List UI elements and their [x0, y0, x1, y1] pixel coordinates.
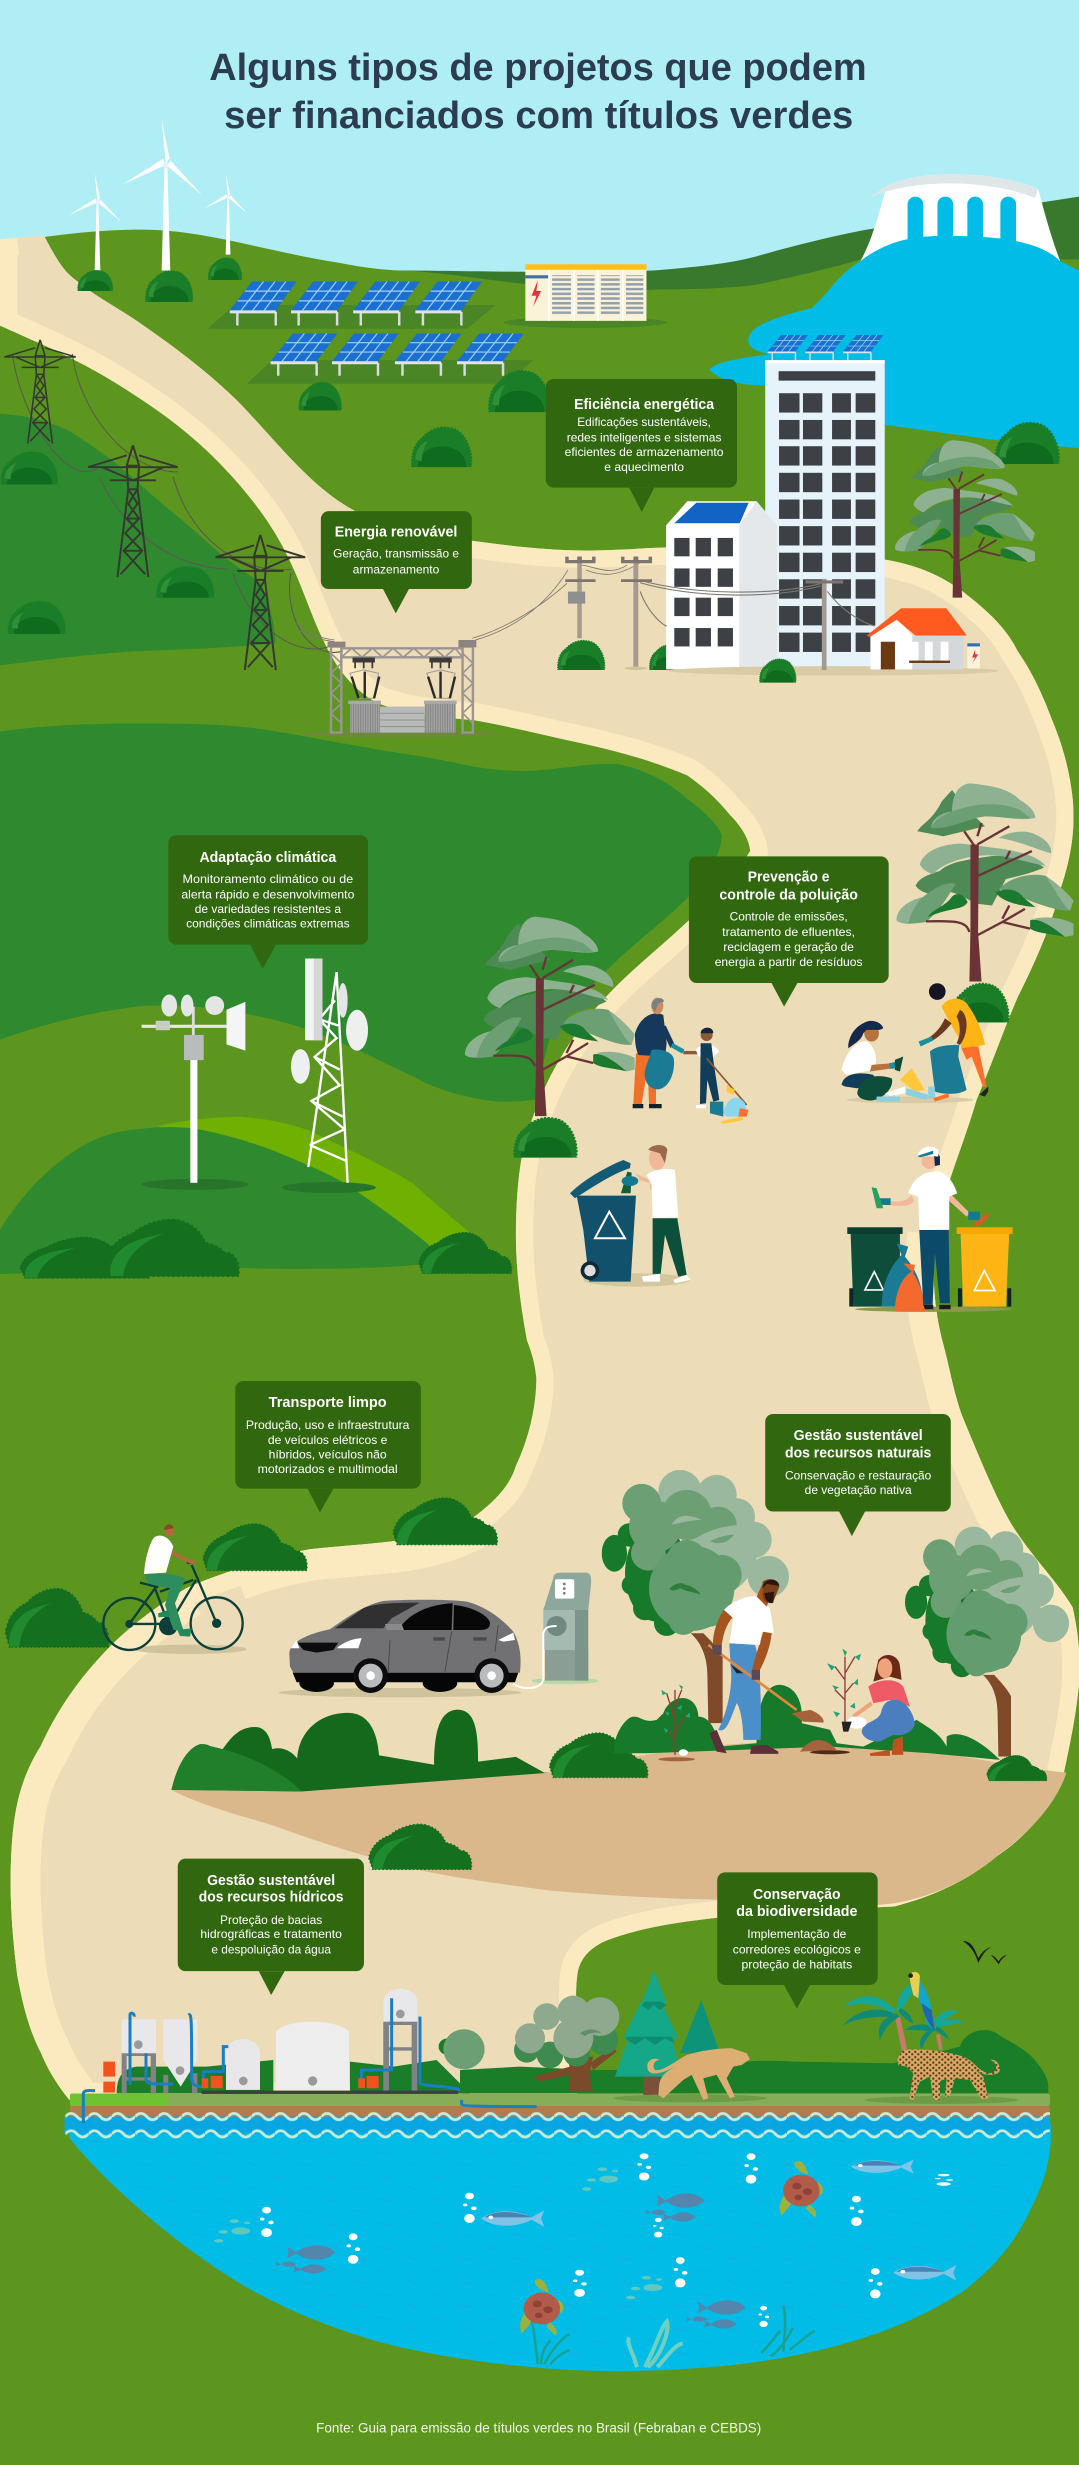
man at bin	[570, 1145, 691, 1287]
back bush	[117, 2060, 470, 2093]
icon: wind turbine center	[123, 120, 202, 271]
bush in front of tree	[757, 1685, 837, 1747]
icon: tank 5	[383, 1989, 417, 2022]
callout: Eficiência energética: Edificações sustentáveis,	[577, 416, 711, 429]
callout: Eficiência energética: redes inteligentes e sistemas	[567, 431, 722, 444]
callout: Gestão sustentável dos recursos naturais	[765, 1414, 951, 1536]
bushes near cyclist	[5, 1498, 497, 1647]
tan ground	[171, 1742, 1066, 1906]
icon: wind turbine left	[69, 173, 121, 271]
callout: Energia renovável: Geração, transmissão e	[333, 548, 459, 561]
callout: Transporte limpo: Produção, uso e infraestrutura	[246, 1419, 410, 1432]
callout: Adaptação climática: de variedades resistentes a	[195, 903, 342, 916]
callout: Gestão sustentável dos recursos hídricos: Gestão sustentável	[207, 1873, 335, 1889]
icon: roof solar	[674, 503, 749, 523]
title	[209, 46, 867, 136]
sky	[0, 0, 1079, 299]
callout: Eficiência energética: eficientes de armazenamento	[565, 446, 724, 459]
transport scene	[103, 1524, 598, 1697]
tree by house	[895, 440, 1035, 598]
sapling	[658, 1685, 695, 1761]
callout: Gestão sustentável dos recursos naturais: de vegetação nativa	[805, 1484, 912, 1497]
callout: Adaptação climática: condições climáticas extremas	[186, 918, 350, 931]
bush near house	[760, 659, 796, 683]
icon: tank 3	[226, 2039, 260, 2090]
medium tree	[514, 1996, 619, 2092]
callout: Conservação da biodiversidade: proteção de habitats	[741, 1958, 852, 1971]
wires	[297, 563, 639, 642]
frames	[122, 2022, 417, 2093]
hill large left	[0, 724, 722, 1102]
icon: pylon 3	[215, 535, 305, 670]
callout: Gestão sustentável dos recursos hídricos: dos recursos hídricos	[199, 1889, 344, 1905]
callout: Energia renovável: Energia renovável	[335, 524, 457, 540]
callout: Transporte limpo	[235, 1381, 421, 1512]
hill upper left	[0, 414, 275, 665]
icon: pumps	[103, 2062, 379, 2093]
source footer: Fonte: Guia para emissão de títulos verdes no Brasil (Febraban e CEBDS)	[316, 2420, 761, 2435]
bright hill crescent	[157, 1117, 495, 1274]
ground strip	[64, 2093, 1050, 2139]
callout: Gestão sustentável dos recursos naturais: dos recursos naturais	[785, 1446, 931, 1462]
road	[0, 236, 1079, 2100]
icon: tank 1	[122, 2019, 156, 2053]
recycling scene	[570, 1145, 1013, 1312]
callout: Gestão sustentável dos recursos naturais: Gestão sustentável	[794, 1428, 923, 1444]
callout: Adaptação climática	[168, 835, 368, 969]
callout: Energia renovável: armazenamento	[353, 563, 439, 576]
callout: Prevenção e controle da poluição: Controle de emissões,	[730, 911, 848, 924]
callout: Conservação da biodiversidade: Implementação de	[747, 1928, 846, 1941]
bush on tan ground	[369, 1824, 472, 1870]
cyclist	[103, 1524, 247, 1654]
callout: Eficiência energética: Eficiência energética	[574, 397, 715, 413]
light green hills	[0, 230, 1079, 818]
seaweed	[532, 2306, 815, 2367]
planting scene	[602, 1470, 1069, 1761]
transmission towers	[4, 340, 305, 670]
water	[69, 2123, 1051, 2371]
large bushes hill	[20, 1219, 512, 1278]
bush below left tree	[514, 1118, 576, 1158]
small tree	[439, 2029, 485, 2093]
icon: utility pole 2	[621, 557, 652, 670]
electric car	[278, 1600, 522, 1697]
icon: utility pole 1	[565, 557, 596, 638]
big bush strip	[171, 1710, 551, 1791]
man planting	[708, 1579, 850, 1754]
wildlife and trees	[460, 1970, 1048, 2104]
hill lower left	[0, 1127, 447, 1274]
people cleaning left	[633, 998, 748, 1124]
back bushes	[460, 2030, 1048, 2093]
pole bushes	[558, 641, 686, 670]
title: Alguns tipos de projetos que podem	[209, 46, 867, 88]
man with bag	[633, 998, 683, 1108]
callout: Eficiência energética	[546, 379, 737, 512]
palm trees	[843, 1983, 965, 2050]
charging station	[513, 1573, 598, 1688]
lake	[709, 236, 1079, 448]
tall building	[765, 335, 885, 669]
shadow row 2	[247, 360, 533, 384]
callout: Gestão sustentável dos recursos hídricos: Proteção de bacias	[220, 1914, 322, 1927]
child with rake	[683, 1028, 748, 1124]
left tree	[465, 917, 635, 1116]
icon: yellow bin	[957, 1227, 1013, 1307]
dark distant hills	[401, 197, 1079, 409]
callout: Adaptação climática: Adaptação climática	[199, 850, 337, 866]
marine life	[214, 2153, 956, 2336]
tree right	[905, 1527, 1069, 1757]
tree left	[602, 1470, 789, 1723]
birds	[963, 1941, 1007, 1965]
callout: Conservação da biodiversidade: da biodiversidade	[736, 1904, 857, 1920]
power lines between pylons	[13, 354, 343, 652]
callout: Transporte limpo: híbridos, veículos não	[269, 1449, 387, 1462]
callout: Transporte limpo: de veículos elétricos e	[268, 1434, 387, 1447]
callout: Prevenção e controle da poluição: Prevenção e	[748, 869, 830, 885]
callout: Prevenção e controle da poluição: controle da poluição	[719, 887, 858, 903]
callout: Transporte limpo: motorizados e multimodal	[258, 1463, 398, 1476]
callout: Adaptação climática: alerta rápido e desenvolvimento	[181, 888, 354, 901]
icon: tank 4	[276, 2022, 349, 2090]
callout: Prevenção e controle da poluição: energia a partir de resíduos	[715, 956, 863, 969]
title: ser financiados com títulos verdes	[224, 94, 853, 136]
callout: Transporte limpo: Transporte limpo	[269, 1395, 387, 1411]
callout: Gestão sustentável dos recursos hídricos: e despoluição da água	[211, 1943, 331, 1956]
telecom tower	[282, 959, 376, 1193]
icon: rooftop solar panels	[768, 335, 883, 360]
person at bins	[847, 1146, 1013, 1312]
callout: Prevenção e controle da poluição: tratamento de efluentes,	[722, 926, 855, 939]
ground shadow buildings	[668, 666, 999, 676]
callout: Energia renovável	[321, 511, 472, 613]
top bushes	[78, 258, 241, 302]
pine trees	[615, 1970, 720, 2095]
icon: dark bin	[847, 1227, 903, 1307]
solar farm	[208, 282, 533, 384]
icon: pipes	[83, 1998, 537, 2123]
back bushes	[613, 1685, 1000, 1760]
icon: wind turbine right	[204, 173, 248, 255]
crouching woman	[842, 1021, 949, 1102]
water treatment plant	[83, 1989, 537, 2123]
dam	[860, 174, 1060, 261]
substation	[302, 640, 498, 737]
icon: trash bags	[882, 1243, 925, 1312]
wires and third pole	[640, 579, 875, 670]
callout: Adaptação climática: Monitoramento climático ou de	[183, 873, 353, 886]
callout: Conservação da biodiversidade: corredores ecológicos e	[733, 1943, 861, 1956]
small building	[666, 501, 777, 669]
wind turbines	[69, 120, 248, 271]
house	[867, 608, 980, 669]
bush below right tree	[952, 984, 1008, 1022]
icon: pylon 2	[88, 445, 178, 577]
right tree	[897, 783, 1073, 981]
jaguar	[865, 2049, 1018, 2104]
callout: Gestão sustentável dos recursos hídricos: hidrográficas e tratamento	[200, 1928, 342, 1941]
icon: tank 2	[163, 2019, 197, 2087]
macaw	[908, 1972, 935, 2032]
icon: pylon 1	[4, 340, 76, 444]
gauges	[134, 2010, 405, 2086]
callout: Eficiência energética: e aquecimento	[604, 461, 684, 474]
callout: Gestão sustentável dos recursos hídricos	[178, 1859, 364, 1995]
battery storage	[503, 264, 667, 328]
shadow row 1	[208, 305, 495, 329]
bush by right tree	[987, 1755, 1047, 1781]
callout: Prevenção e controle da poluição: reciclagem e geração de	[723, 941, 854, 954]
callout: Conservação da biodiversidade	[717, 1872, 878, 2009]
woman planting	[827, 1649, 915, 1756]
callout: Prevenção e controle da poluição	[689, 856, 889, 1007]
mid bushes	[2, 371, 1059, 634]
woman in orange	[919, 983, 988, 1097]
bush in front of strip	[549, 1733, 648, 1778]
people cleaning right	[842, 983, 988, 1103]
substation and poles	[297, 557, 652, 737]
puma	[613, 2048, 767, 2102]
callout: Conservação da biodiversidade: Conservação	[753, 1887, 841, 1903]
weather station	[142, 995, 249, 1190]
callout: Gestão sustentável dos recursos naturais: Conservação e restauração	[785, 1469, 931, 1482]
